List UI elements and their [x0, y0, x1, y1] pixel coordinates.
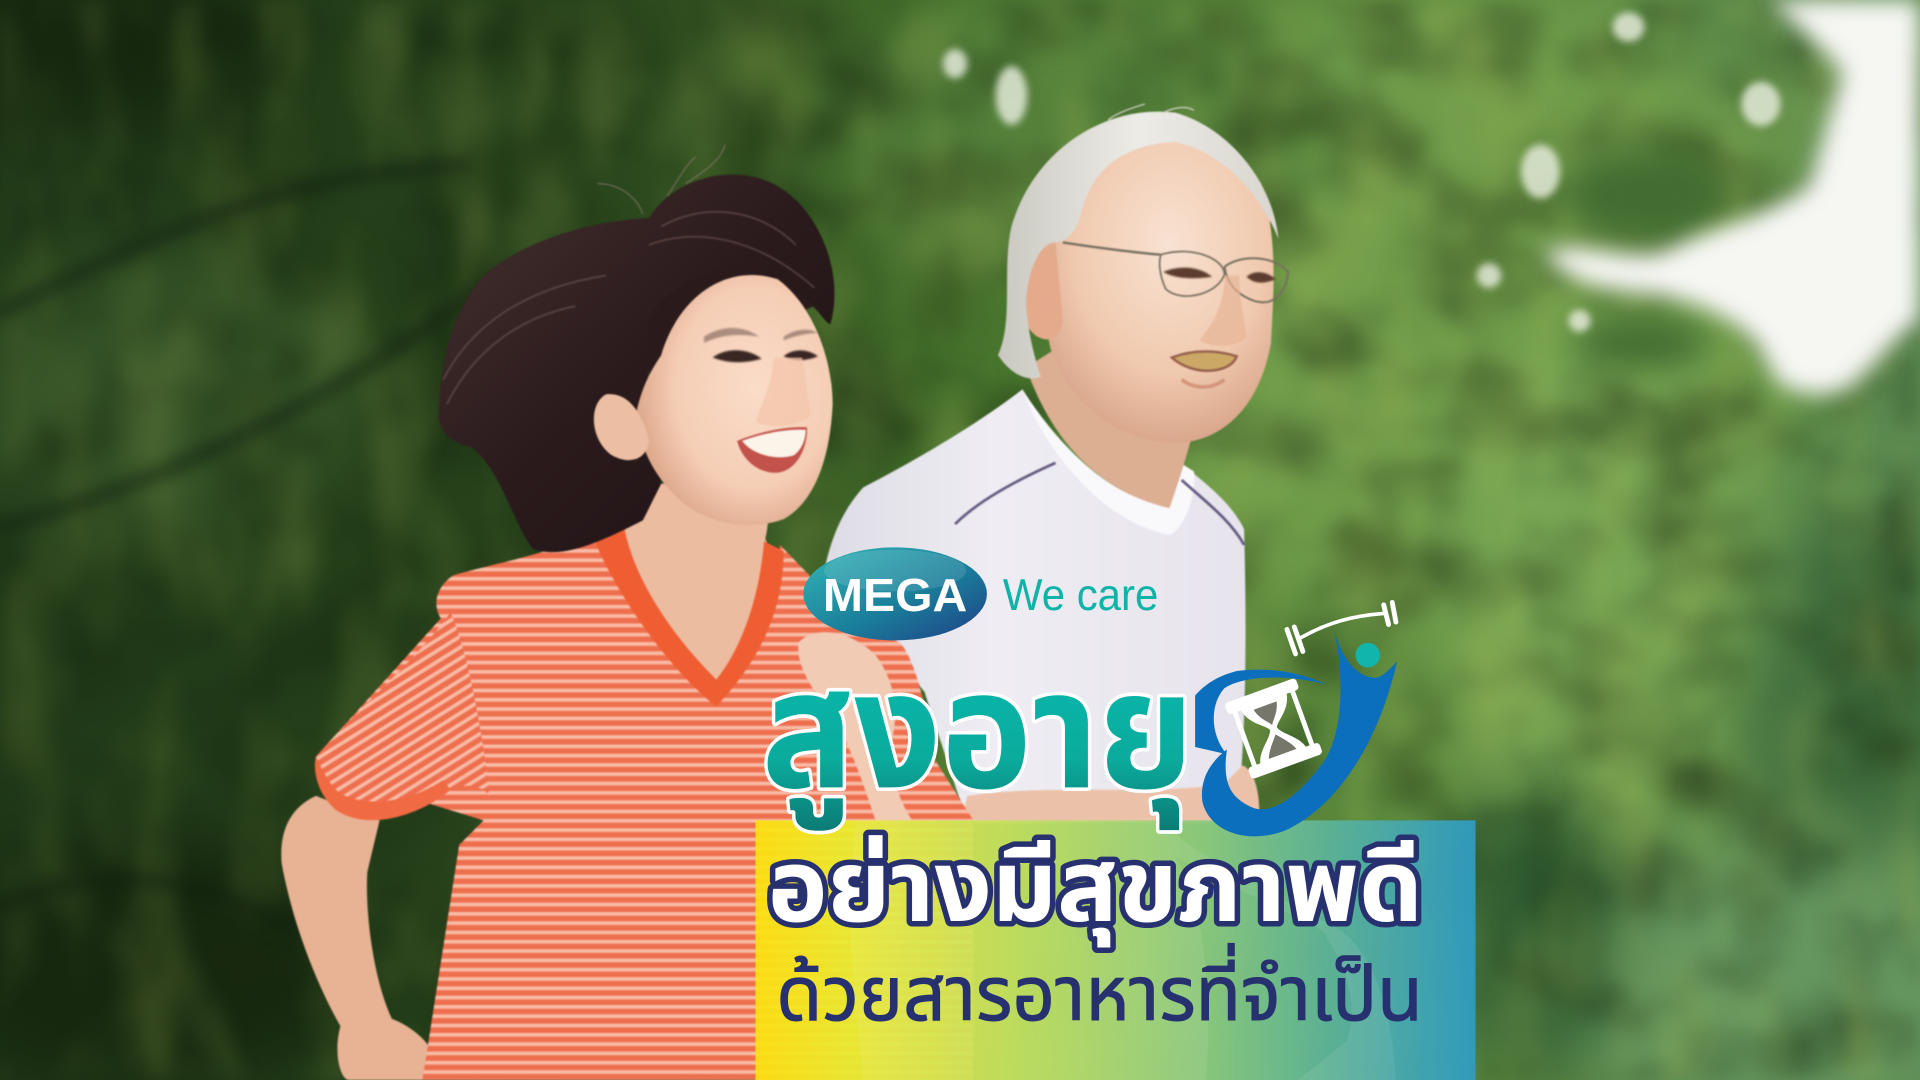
icon: ageing figure with hourglass and barbell	[1195, 602, 1397, 836]
woman shirt	[316, 533, 973, 1080]
woman neck	[606, 484, 781, 704]
subtitle: อย่างมีสุขภาพดี: อย่างมีสุขภาพดี	[768, 831, 1423, 947]
woman back arm	[281, 796, 443, 1080]
woman sleeve	[316, 612, 490, 808]
person: woman	[281, 144, 973, 1080]
woman hand	[798, 632, 912, 820]
person: man	[825, 104, 1288, 823]
ghosted hand on banner	[850, 820, 1396, 1080]
woman smile	[737, 427, 807, 473]
barbell	[1287, 602, 1396, 654]
man forearm	[961, 765, 1259, 823]
logo: MEGA We care	[803, 547, 1158, 640]
bokeh highlights	[943, 12, 1780, 332]
man t-shirt	[825, 389, 1246, 823]
man hair	[998, 112, 1278, 379]
man glasses	[1063, 242, 1288, 302]
sky	[1544, 0, 1920, 394]
tagline: ด้วยสารอาหารที่จำเป็น: ด้วยสารอาหารที่จำเป็น	[776, 943, 1423, 1037]
man neck	[1026, 343, 1194, 508]
dark leaf mass near sky	[1561, 147, 1733, 370]
woman features	[704, 328, 818, 362]
figure head	[1356, 643, 1380, 667]
banner panel	[756, 820, 1476, 1080]
woman ear	[594, 394, 649, 460]
woman hair	[438, 175, 834, 552]
title: สูงอายุ: สูงอายุ	[762, 638, 1194, 830]
logo: MEGA We care: MEGA	[823, 569, 967, 621]
man ear	[1024, 242, 1063, 339]
branches	[0, 165, 490, 931]
man face	[1043, 138, 1274, 443]
woman face	[637, 275, 833, 525]
logo: MEGA We care: We care	[1003, 571, 1158, 620]
woman hair underlay	[649, 270, 814, 416]
figure swoosh	[1202, 628, 1397, 836]
man smile	[1172, 351, 1237, 371]
woman collar	[593, 529, 784, 707]
hourglass	[1224, 678, 1323, 780]
